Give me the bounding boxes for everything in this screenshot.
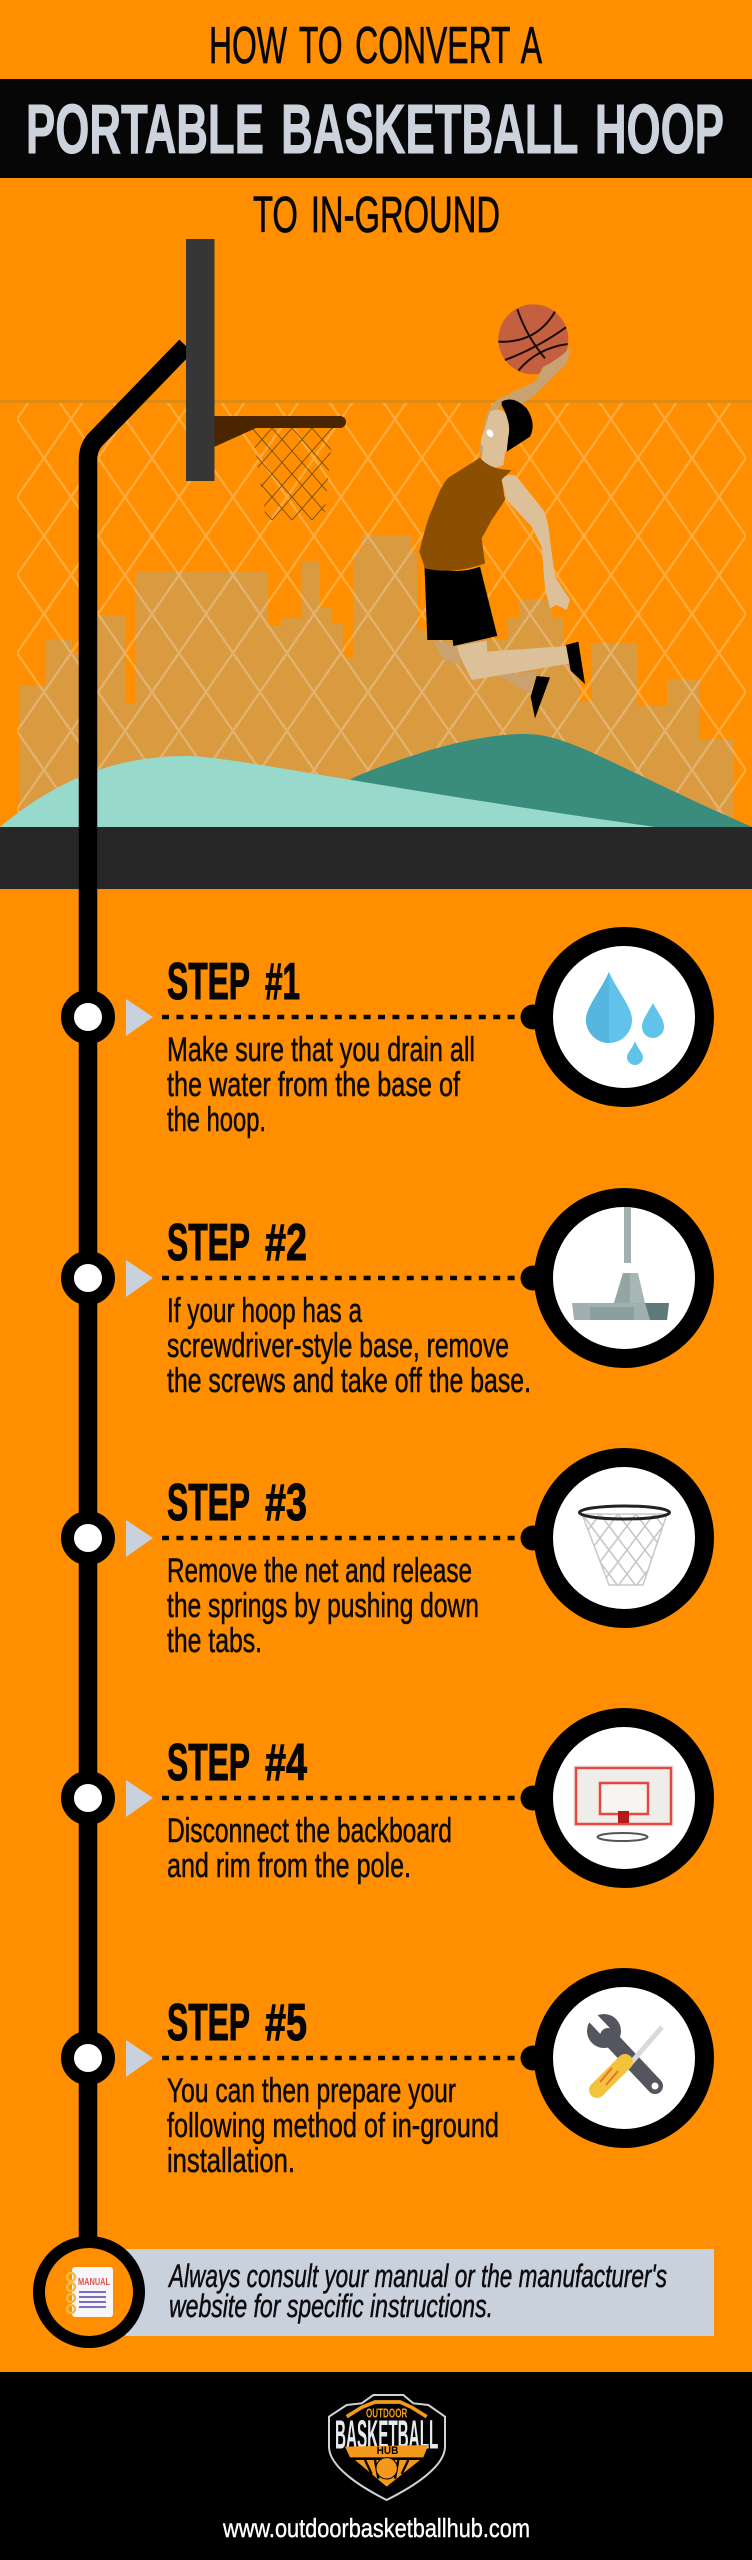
- eye: [485, 428, 495, 438]
- raised arm: [478, 347, 572, 453]
- hair: [502, 399, 533, 452]
- step heading: #1: [265, 953, 300, 1011]
- callout panel: [126, 2249, 714, 2336]
- step text: following method of in-ground: [167, 2107, 499, 2145]
- step text: If your hoop has a: [167, 1292, 362, 1330]
- hoop: net: [252, 428, 333, 520]
- callout text: [168, 2258, 667, 2324]
- head: [481, 410, 514, 468]
- timeline marker: [68, 2038, 108, 2078]
- lowered arm: [502, 475, 570, 610]
- pointer arrow: [126, 1260, 153, 1297]
- timeline marker: [68, 1258, 108, 1298]
- step heading: STEP: [167, 953, 250, 1011]
- step heading: #3: [265, 1474, 307, 1532]
- step text: installation.: [167, 2142, 295, 2180]
- hoop: rim and brace: [210, 416, 346, 447]
- step text: screwdriver-style base, remove: [167, 1327, 509, 1365]
- icon: wrench and screwdriver: [544, 1978, 704, 2138]
- icon: basketball net: [544, 1458, 704, 1618]
- logo: outdoor basketball hub: OUTDOOR: [366, 2406, 407, 2420]
- icon: manual: [39, 2242, 139, 2342]
- step text: Disconnect the backboard: [167, 1812, 452, 1850]
- footer: BASKETBALL: [335, 2411, 438, 2457]
- dotted connector: [162, 1526, 546, 1550]
- step text: and rim from the pole.: [167, 1847, 411, 1885]
- step 2: [68, 1198, 704, 1400]
- step text: [167, 1292, 531, 1400]
- front leg: [457, 641, 570, 680]
- title line 1: HOW TO CONVERT A: [209, 17, 542, 75]
- step text: the tabs.: [167, 1622, 262, 1660]
- dotted connector: [162, 1266, 546, 1290]
- step heading: STEP: [167, 1474, 250, 1532]
- pointer arrow: [126, 1780, 153, 1817]
- step 4: [68, 1718, 704, 1885]
- step heading: #2: [265, 1214, 307, 1272]
- title line 3: TO IN-GROUND: [253, 186, 500, 243]
- icon: water drops: [544, 936, 704, 1098]
- step 5: [68, 1978, 704, 2180]
- scene: skyline backdrop: [20, 535, 734, 827]
- step text: [167, 2072, 499, 2180]
- dotted connector: [162, 2046, 546, 2070]
- step heading: STEP: [167, 1734, 250, 1792]
- website url: www.outdoorbasketballhub.com: [222, 2513, 530, 2543]
- logo: outdoor basketball hub: HUB: [377, 2445, 399, 2457]
- step 3: [68, 1458, 704, 1660]
- icon: hoop base: [544, 1198, 704, 1358]
- scene: hills: [0, 734, 752, 827]
- shorts: [424, 563, 497, 646]
- pointer arrow: [126, 1520, 153, 1557]
- icon: manual: MANUAL: [78, 2277, 110, 2288]
- step text: [167, 1031, 475, 1139]
- scene: chain-link fence: [0, 400, 752, 827]
- step heading: #4: [265, 1734, 307, 1792]
- step text: the water from the base of: [167, 1066, 460, 1104]
- shoes: [531, 642, 585, 718]
- step 1: [68, 936, 704, 1139]
- icon: backboard: [544, 1718, 704, 1878]
- step heading: STEP: [167, 1994, 250, 2052]
- callout text: website for specific instructions.: [169, 2288, 493, 2324]
- step text: Make sure that you drain all: [167, 1031, 475, 1069]
- pointer arrow: [126, 999, 153, 1036]
- hoop: backboard: [186, 239, 214, 481]
- step text: the springs by pushing down: [167, 1587, 479, 1625]
- step text: You can then prepare your: [167, 2072, 456, 2110]
- timeline pole: [88, 346, 186, 2245]
- step heading: #5: [265, 1994, 307, 2052]
- step heading: STEP: [167, 1214, 250, 1272]
- scene: ground strip: [0, 827, 752, 889]
- dotted connector: [162, 1004, 546, 1030]
- back thigh: [433, 642, 462, 665]
- step text: the screws and take off the base.: [167, 1362, 531, 1400]
- jersey: [419, 458, 512, 571]
- timeline marker: [68, 1778, 108, 1818]
- step text: the hoop.: [167, 1101, 266, 1139]
- pointer arrow: [126, 2040, 153, 2077]
- player jumping with ball: [419, 304, 585, 718]
- step text: [167, 1812, 452, 1885]
- timeline marker: [68, 1518, 108, 1558]
- back calf: [493, 672, 537, 693]
- step text: Remove the net and release: [167, 1552, 472, 1590]
- callout: consult manual: [39, 2242, 714, 2342]
- basketball: [498, 304, 568, 374]
- timeline marker: [68, 996, 108, 1038]
- logo: outdoor basketball hub: [329, 2395, 445, 2500]
- step text: [167, 1552, 479, 1660]
- footer: [0, 2372, 752, 2560]
- dotted connector: [162, 1786, 546, 1810]
